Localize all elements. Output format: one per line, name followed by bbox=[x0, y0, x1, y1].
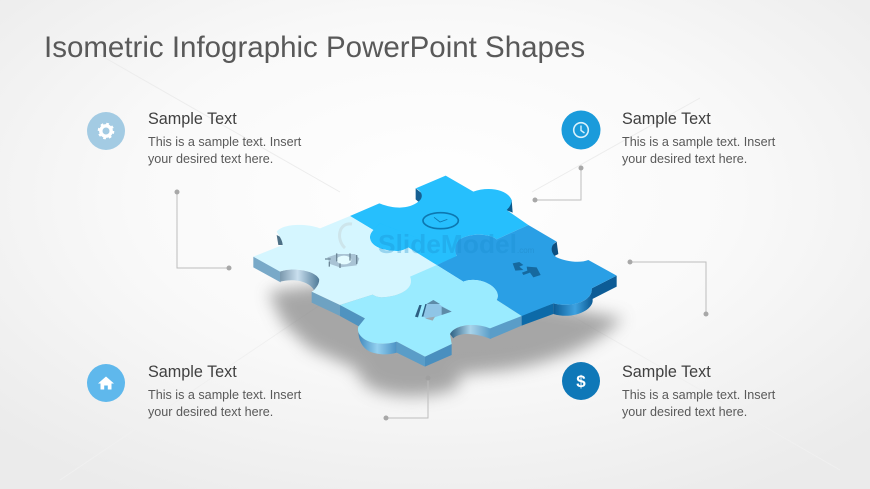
icon: dollar: $ bbox=[576, 372, 586, 391]
icon: gear bbox=[87, 112, 125, 150]
title: Isometric Infographic PowerPoint Shapes bbox=[44, 31, 585, 64]
puzzle piece: top knob bbox=[370, 223, 440, 259]
connector: top right bbox=[532, 166, 584, 202]
puzzle side walls bbox=[253, 188, 617, 367]
callout: bottom left bbox=[87, 363, 302, 419]
body text: your desired text here. bbox=[148, 152, 273, 166]
carved icon: clock bbox=[423, 213, 458, 229]
carved icon: dollar bbox=[513, 262, 541, 277]
body text: your desired text here. bbox=[622, 405, 747, 419]
icon: home bbox=[87, 364, 125, 402]
heading: Sample Text bbox=[148, 110, 237, 128]
body text: This is a sample text. Insert bbox=[622, 388, 776, 402]
body text: This is a sample text. Insert bbox=[148, 135, 302, 149]
puzzle bbox=[253, 176, 617, 367]
carved icon: gear bbox=[325, 253, 359, 268]
connector: bottom bbox=[384, 376, 430, 420]
connector: top left bbox=[174, 190, 232, 270]
puzzle piece: left bbox=[253, 216, 437, 305]
body text: This is a sample text. Insert bbox=[622, 135, 776, 149]
body text: your desired text here. bbox=[148, 405, 273, 419]
heading: Sample Text bbox=[622, 110, 711, 128]
body text: This is a sample text. Insert bbox=[148, 388, 302, 402]
body text: your desired text here. bbox=[622, 152, 747, 166]
watermark: .com bbox=[517, 246, 535, 255]
shadow under puzzle bbox=[268, 285, 623, 396]
callout: top right bbox=[562, 110, 776, 166]
connector: right bbox=[628, 260, 708, 316]
watermark: SlideModel bbox=[378, 229, 517, 259]
watermark bbox=[340, 224, 535, 259]
puzzle piece: right bbox=[437, 225, 617, 316]
carved icon: home bbox=[415, 300, 452, 321]
callout: bottom right bbox=[562, 362, 776, 419]
icon: dollar bbox=[562, 362, 600, 400]
puzzle piece: bottom bbox=[340, 265, 522, 357]
puzzle piece: top bbox=[350, 176, 528, 265]
icon: clock bbox=[562, 110, 600, 150]
callout: top left bbox=[87, 110, 302, 166]
heading: Sample Text bbox=[148, 363, 237, 381]
heading: Sample Text bbox=[622, 363, 711, 381]
